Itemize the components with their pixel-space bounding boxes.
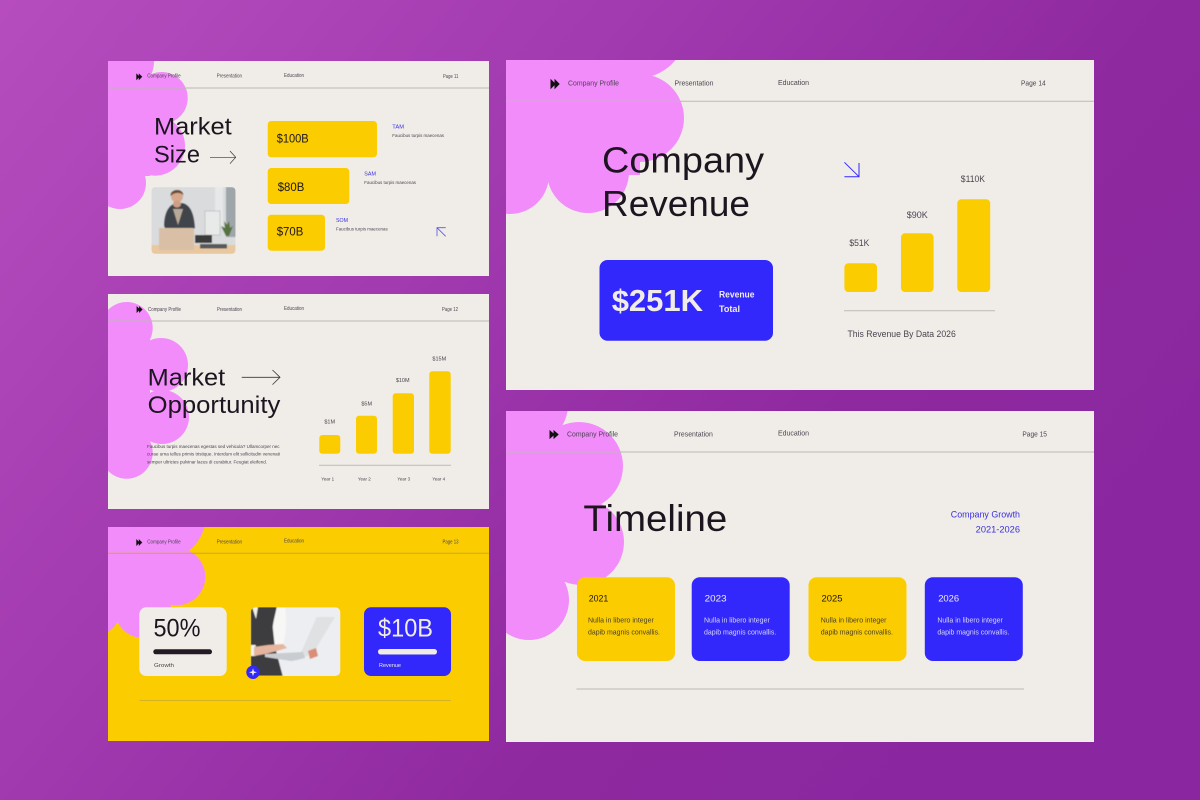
bar: SAM $80B: $80B: [278, 182, 305, 194]
bar chart: $10M: [396, 378, 410, 384]
card: 2025: Nulla in libero integer: [821, 618, 887, 625]
body text: curae urna tellus primis tristique. Interdum elit sollicitudin venenati: [147, 452, 280, 457]
label: SAM: SAM: [364, 171, 376, 177]
pink blob: [506, 60, 684, 214]
header: [108, 538, 489, 553]
subheading: Company Growth: Company Growth: [951, 509, 1020, 519]
icon: blue sparkle badge: [246, 666, 260, 679]
panel: Growth stats slide: [108, 527, 489, 741]
bar chart: Year 4: [432, 476, 446, 481]
panel: Timeline slide: [506, 411, 1094, 742]
label: SOM: SOM: [336, 218, 348, 224]
bar chart: $90K: [907, 210, 928, 220]
heading: Market Opportunity: Market: [148, 365, 225, 392]
bar chart: $15M: [432, 357, 447, 363]
panel: Market Size slide: [108, 61, 489, 276]
header: Page 11: [443, 74, 458, 80]
bar chart: $1M: [324, 420, 335, 426]
body text: Faucibus turpis maecenas egestas sed vehicula? Ullamcorper nec: [147, 444, 280, 449]
header: Page 12: [442, 307, 458, 313]
header: Presentation: [217, 307, 242, 313]
header: Company Profile: [147, 74, 181, 80]
card: 2026: Nulla in libero integer: [937, 618, 1004, 625]
card: 50% growth: 50%: [154, 615, 200, 643]
bar chart: [319, 357, 451, 481]
card: 50% growth: [139, 607, 227, 676]
pink blob: [108, 527, 206, 638]
header: [506, 430, 1094, 452]
subheading: Company Growth: [951, 509, 1020, 534]
heading: Company Revenue: Company: [602, 139, 764, 180]
panel: Company Revenue slide: [506, 60, 1094, 390]
header: Page 13: [442, 539, 459, 545]
card: 2023: [692, 577, 790, 661]
bar: SAM $80B: [268, 168, 349, 204]
card: $10B revenue: Revenue: [379, 663, 401, 669]
header: Education: [778, 80, 809, 87]
label: SOM: Faucibus turpis maecenas: [336, 226, 388, 231]
photo: man at laptop: [151, 187, 236, 254]
bar: TAM $100B: $100B: [277, 133, 309, 145]
bar chart: [844, 174, 995, 311]
callout: $251K revenue total: [600, 260, 773, 341]
card: 2026: 2026: [938, 594, 959, 605]
header: Education: [284, 73, 304, 79]
heading: Market Size: [154, 113, 232, 169]
header: Presentation: [217, 74, 242, 80]
header: Company Profile: [148, 307, 181, 313]
bar chart: $110K: [961, 174, 985, 184]
card: 2021: 2021: [589, 594, 608, 605]
heading: Market Size: Market: [154, 113, 232, 140]
header: Page 14: [1021, 81, 1046, 88]
bar: SOM $70B: $70B: [277, 227, 304, 239]
callout: $251K revenue total: Revenue: [719, 289, 754, 299]
header: Company Profile: [567, 431, 618, 438]
body text: [147, 444, 280, 464]
bar: TAM $100B: [268, 121, 377, 157]
header: [506, 80, 1094, 101]
label: SOM: [336, 218, 388, 231]
bar chart: $51K: [849, 238, 869, 248]
body text: semper ultricies pulvinar lacus di curabitur. Feugiat eleifend.: [147, 459, 267, 464]
header: Presentation: [674, 81, 714, 88]
label: TAM: Faucibus turpis maecenas: [392, 133, 445, 138]
header: [108, 73, 489, 88]
bar chart: $5M: [361, 402, 372, 408]
card: 2023: 2023: [705, 594, 727, 605]
bar chart: Year 3: [397, 476, 411, 481]
pink blob: [108, 61, 188, 209]
card: 2026: dapib magnis convallis.: [937, 629, 1009, 636]
header: Company Profile: [568, 81, 619, 88]
card: 2021: [577, 577, 675, 661]
callout: $251K revenue total: $251K: [612, 283, 704, 318]
arrow: up-left: [437, 228, 446, 236]
card: 2021: Nulla in libero integer: [588, 618, 654, 625]
label: TAM: [392, 125, 445, 138]
header: Presentation: [674, 431, 713, 438]
arrow: down-right: [844, 162, 859, 177]
card: 50% growth: Growth: [154, 663, 174, 669]
caption: This Revenue By Data 2026: [848, 329, 956, 339]
card: 2021: dapib magnis convallis.: [588, 629, 660, 636]
card: 2025: dapib magnis convallis.: [821, 629, 893, 636]
header: Presentation: [217, 539, 242, 545]
heading: Market Size: Size: [154, 142, 200, 169]
arrow: right: [242, 370, 280, 385]
heading: Market Opportunity: Opportunity: [148, 392, 281, 419]
card: 2023: Nulla in libero integer: [704, 618, 770, 625]
heading: Timeline: Timeline: [583, 498, 727, 539]
arrow: right: [210, 151, 236, 164]
label: TAM: TAM: [392, 125, 404, 131]
label: SAM: Faucibus turpis maecenas: [364, 180, 417, 185]
card: 2025: 2025: [822, 594, 842, 605]
pink blob: [506, 411, 624, 640]
pink blob: [100, 302, 189, 479]
subheading: Company Growth: 2021-2026: [976, 524, 1020, 534]
card: $10B revenue: $10B: [378, 615, 433, 643]
card: 2026: [925, 577, 1023, 661]
photo: woman holding laptop: [250, 607, 341, 677]
bar: SOM $70B: [268, 215, 325, 251]
header: Education: [778, 430, 809, 437]
bar chart: Year 2: [358, 476, 371, 481]
header: [108, 306, 489, 321]
card: $10B revenue: [364, 607, 451, 676]
callout: $251K revenue total: Total: [719, 304, 740, 314]
panel: Market Opportunity slide: [100, 294, 489, 509]
heading: Market Opportunity: [148, 365, 281, 419]
header: Education: [284, 306, 304, 312]
heading: Company Revenue: Revenue: [602, 183, 750, 224]
header: Education: [284, 538, 304, 544]
header: Company Profile: [147, 539, 181, 545]
header: Page 15: [1022, 431, 1047, 438]
label: SAM: [364, 171, 417, 185]
bar chart: Year 1: [321, 476, 335, 481]
heading: Company Revenue: [602, 139, 764, 224]
card: 2023: dapib magnis convallis.: [704, 629, 776, 636]
card: 2025: [808, 577, 906, 661]
